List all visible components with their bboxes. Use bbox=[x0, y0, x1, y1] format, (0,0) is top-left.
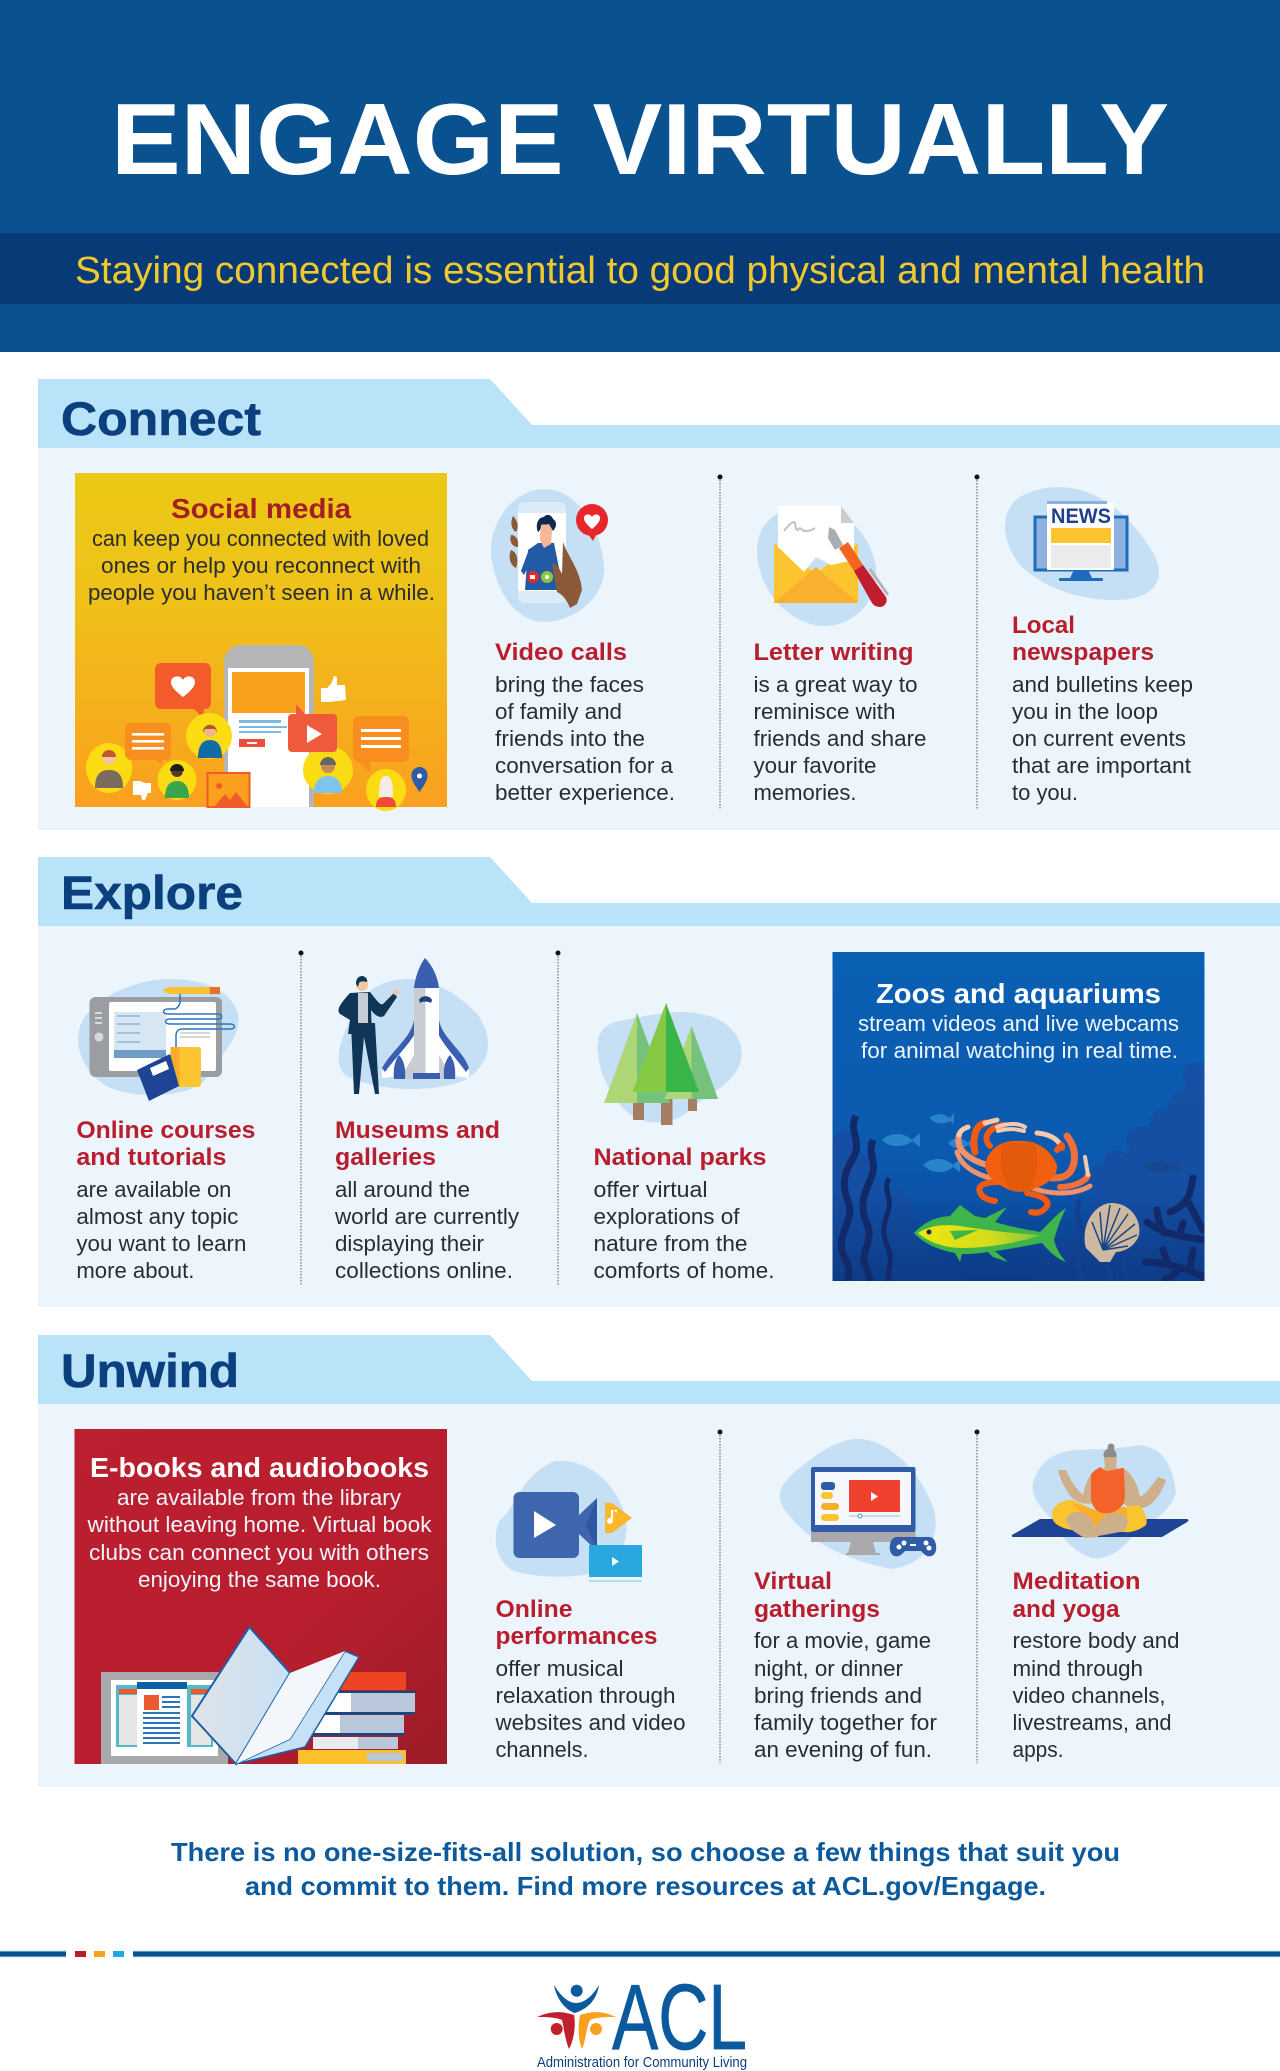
card: social media: ones or help you reconnect with bbox=[101, 553, 421, 578]
closing message: There is no one-size-fits-all solution, so choose a few things that suit you bbox=[171, 1837, 1120, 1867]
item: local newspapers: Local bbox=[1012, 612, 1075, 639]
illustration: sea life bbox=[831, 1060, 1212, 1281]
card: zoos and aquariums: Zoos and aquariums bbox=[876, 978, 1161, 1009]
title: ENGAGE VIRTUALLY bbox=[111, 84, 1169, 196]
item: video calls: of family and bbox=[495, 699, 622, 724]
illustration: social media phone and bubbles bbox=[86, 645, 428, 811]
item: meditation and yoga: and yoga bbox=[1012, 1596, 1120, 1623]
card: social media: Social media bbox=[171, 493, 351, 524]
item: letter writing: Letter writing bbox=[754, 639, 914, 666]
item: online courses: you want to learn bbox=[76, 1231, 246, 1256]
item: virtual gatherings: family together for bbox=[754, 1710, 937, 1735]
item: letter writing: is a great way to bbox=[754, 672, 918, 697]
item: museums: Museums and bbox=[335, 1117, 500, 1144]
item: video calls: conversation for a bbox=[495, 753, 674, 778]
item: museums: collections online. bbox=[335, 1258, 513, 1283]
icon: ACL figures bbox=[537, 1985, 616, 2049]
item: national parks: explorations of bbox=[594, 1204, 740, 1229]
card: zoos and aquariums bbox=[831, 952, 1212, 1281]
item: virtual gatherings: an evening of fun. bbox=[754, 1737, 932, 1762]
item: national parks: nature from the bbox=[594, 1231, 748, 1256]
item: museums: displaying their bbox=[335, 1231, 484, 1256]
item: local newspapers: on current events bbox=[1012, 726, 1186, 751]
section tab: connect bbox=[38, 379, 1280, 448]
icon: video call on phone bbox=[491, 489, 608, 622]
item: national parks: offer virtual bbox=[594, 1177, 708, 1202]
card: social media: can keep you connected with loved bbox=[92, 526, 429, 551]
card: e-books and audiobooks: without leaving home. Virtual book bbox=[86, 1512, 433, 1537]
item: online courses bbox=[76, 979, 255, 1283]
item: meditation and yoga: Meditation bbox=[1012, 1568, 1140, 1595]
item: local newspapers: you in the loop bbox=[1012, 699, 1158, 724]
item: local newspapers bbox=[1005, 487, 1193, 805]
item: national parks: National parks bbox=[594, 1144, 766, 1171]
item: online courses: are available on bbox=[76, 1177, 231, 1202]
item: meditation and yoga bbox=[1012, 1444, 1188, 1762]
item: local newspapers: and bulletins keep bbox=[1012, 672, 1193, 697]
item: online performances: offer musical bbox=[496, 1656, 624, 1681]
heading: unwind: Unwind bbox=[61, 1344, 239, 1397]
item: local newspapers: to you. bbox=[1012, 780, 1078, 805]
item: virtual gatherings: gatherings bbox=[754, 1596, 880, 1623]
item: meditation and yoga: apps. bbox=[1012, 1737, 1064, 1762]
closing message: and commit to them. Find more resources at ACL.gov/Engage. bbox=[245, 1871, 1046, 1901]
illustration: books and tablet bbox=[101, 1627, 415, 1764]
card: social media: people you haven’t seen in a while. bbox=[88, 580, 435, 605]
item: online performances: channels. bbox=[496, 1737, 588, 1762]
heading: connect: Connect bbox=[61, 392, 261, 445]
item: letter writing: memories. bbox=[754, 780, 856, 805]
item: virtual gatherings bbox=[754, 1439, 937, 1762]
item: online performances: relaxation through bbox=[496, 1683, 676, 1708]
item: online performances bbox=[494, 1461, 686, 1762]
item: online courses: almost any topic bbox=[76, 1204, 238, 1229]
item: local newspapers: that are important bbox=[1012, 753, 1191, 778]
item: online courses: more about. bbox=[76, 1258, 194, 1283]
item: museums: galleries bbox=[335, 1144, 436, 1171]
card: e-books and audiobooks: clubs can connect you with others bbox=[89, 1540, 429, 1565]
card: e-books and audiobooks: are available from the library bbox=[117, 1485, 401, 1510]
item: meditation and yoga: restore body and bbox=[1012, 1628, 1180, 1653]
card: e-books and audiobooks: enjoying the same book. bbox=[138, 1567, 381, 1592]
item: video calls: better experience. bbox=[495, 780, 675, 805]
item: virtual gatherings: bring friends and bbox=[754, 1683, 922, 1708]
item: museums: all around the bbox=[335, 1177, 470, 1202]
icon: person meditating bbox=[1012, 1444, 1188, 1558]
section tab: unwind bbox=[38, 1335, 1280, 1404]
logo: ACL bbox=[537, 1965, 747, 2071]
item: online performances: Online bbox=[496, 1596, 572, 1623]
icon: desktop with video and controller bbox=[780, 1439, 936, 1569]
closing message bbox=[171, 1837, 1120, 1901]
icon: video camera and music bbox=[496, 1461, 642, 1581]
panel: connect bbox=[38, 379, 1280, 830]
icon: man and rocket exhibit bbox=[338, 958, 488, 1094]
item: meditation and yoga: mind through bbox=[1012, 1656, 1143, 1681]
item: video calls bbox=[491, 489, 675, 805]
item: letter writing: friends and share bbox=[754, 726, 926, 751]
panel: explore bbox=[38, 857, 1280, 1307]
logo: ACL: Administration for Community Living bbox=[537, 2054, 747, 2071]
panel: unwind bbox=[38, 1335, 1280, 1787]
item: local newspapers: newspapers bbox=[1012, 639, 1154, 666]
icon: envelope and pen bbox=[757, 506, 889, 626]
card: zoos and aquariums: for animal watching in real time. bbox=[861, 1038, 1178, 1063]
logo: ACL: ACL bbox=[612, 1965, 747, 2069]
icon: news on monitor bbox=[1005, 487, 1159, 600]
item: online performances: performances bbox=[496, 1623, 658, 1650]
item: online courses: and tutorials bbox=[76, 1144, 226, 1171]
item: letter writing bbox=[754, 506, 926, 805]
item: virtual gatherings: for a movie, game bbox=[754, 1628, 931, 1653]
icon: news on monitor: NEWS bbox=[1051, 505, 1111, 528]
icon: tablet and notebooks bbox=[78, 979, 238, 1101]
item: virtual gatherings: night, or dinner bbox=[754, 1656, 903, 1681]
heading: explore: Explore bbox=[61, 866, 243, 919]
item: national parks bbox=[594, 1003, 774, 1283]
item: online performances: websites and video bbox=[494, 1710, 686, 1735]
item: video calls: bring the faces bbox=[495, 672, 644, 697]
section tab: explore bbox=[38, 857, 1280, 926]
icon: pine trees bbox=[597, 1003, 742, 1125]
item: museums: world are currently bbox=[334, 1204, 519, 1229]
card: e-books and audiobooks bbox=[74, 1429, 447, 1764]
item: video calls: friends into the bbox=[495, 726, 645, 751]
item: meditation and yoga: livestreams, and bbox=[1012, 1710, 1172, 1735]
item: letter writing: your favorite bbox=[754, 753, 876, 778]
card: social media bbox=[75, 473, 447, 811]
item: museums bbox=[334, 958, 519, 1283]
item: video calls: Video calls bbox=[495, 639, 627, 666]
card: e-books and audiobooks: E-books and audiobooks bbox=[90, 1452, 429, 1483]
item: letter writing: reminisce with bbox=[754, 699, 896, 724]
item: virtual gatherings: Virtual bbox=[754, 1568, 832, 1595]
item: online courses: Online courses bbox=[76, 1117, 255, 1144]
subtitle: Staying connected is essential to good physical and mental health bbox=[75, 250, 1205, 292]
card: zoos and aquariums: stream videos and live webcams bbox=[858, 1011, 1179, 1036]
item: national parks: comforts of home. bbox=[594, 1258, 774, 1283]
header banner bbox=[0, 0, 1280, 352]
item: meditation and yoga: video channels, bbox=[1012, 1683, 1166, 1708]
footer rule with colored squares bbox=[0, 1950, 1280, 1958]
